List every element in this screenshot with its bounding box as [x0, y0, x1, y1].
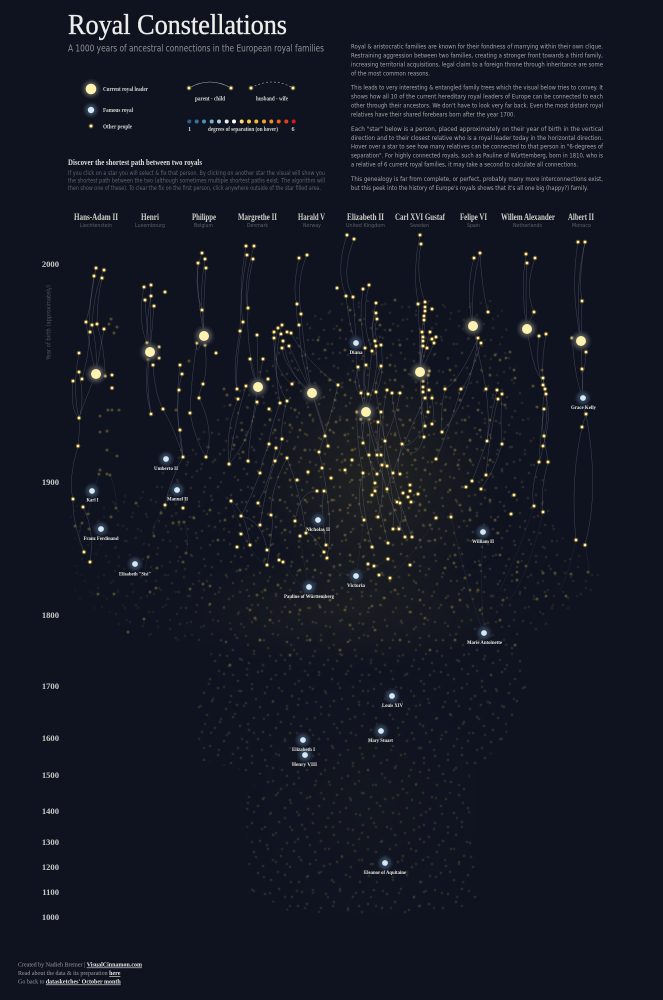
year axis [42, 259, 59, 922]
famous royal labels: Louis XIV [382, 703, 403, 709]
year axis: 1600 [42, 733, 59, 743]
royal leader column headers: Harald V [298, 213, 325, 223]
legend: star types [80, 78, 148, 130]
famous royal labels [84, 350, 596, 876]
faint links [79, 474, 589, 633]
royal leader column headers [74, 213, 594, 229]
legend item: famous royal: Famous royal [103, 107, 133, 114]
text block: introduction: a relative of 6 current royal families, it may take a second to calculate all connections. [351, 162, 578, 168]
subtitle: A 1000 years of ancestral connections in the European royal families [68, 44, 324, 54]
faint haze of ancestors [170, 350, 530, 930]
ordinary relatives: bright stars [73, 235, 586, 578]
royal leader column headers: Philippe [192, 213, 216, 223]
constellation network [60, 235, 610, 930]
text block: shortest path instructions: If you click on a star you will select & fix that person. By clicking on another star the visual will show you [68, 170, 325, 177]
legend: link types [187, 82, 295, 102]
text block: introduction: Each "star" below is a person, placed approximately on their year of birth in the vertical [351, 126, 603, 133]
year axis: 1800 [42, 610, 59, 620]
text block: introduction: relatives have their shared forebears born after the year 1700. [351, 112, 515, 118]
text block: introduction: increasing territorial acquisitions, legal claim to a foreign throne through inheritance are some [351, 62, 603, 68]
famous royal labels: Karl I [86, 498, 98, 504]
year axis: 1500 [42, 770, 59, 780]
famous royals [84, 334, 592, 872]
text block: introduction: This genealogy is far from complete, or perfect, probably many more interconnections exist, [350, 176, 603, 183]
text block: introduction: direction and to their closest relative who is a royal leader today in the horizontal direction. [351, 135, 603, 142]
year axis: 1700 [42, 681, 59, 691]
famous royal labels: Marie Antoinette [467, 640, 503, 646]
royal leader column headers: Liechtenstein [80, 223, 112, 229]
current royal leaders [85, 315, 592, 423]
royal leader column headers: Willem Alexander [501, 213, 556, 223]
royal leader column headers: Luxembourg [135, 223, 165, 229]
footer credits: Go back to datasketches' October month [18, 980, 121, 986]
text block: shortest path instructions: then show one of these). To clear the fix on the first person, click anywhere outside of the star filled area. [68, 185, 321, 192]
legend item: husband - wife link: husband - wife [256, 96, 288, 102]
text block: introduction: but this peek into the history of Europe's royals shows that it's all one big (happy?) family. [351, 185, 588, 192]
famous royal labels: Eleanor of Aquitaine [364, 870, 407, 876]
famous royal labels: Pauline of Württemberg [284, 594, 334, 600]
text block: introduction: This leads to very interesting & entangled family trees which the visual below tries to convey. It [350, 84, 603, 92]
title: Royal Constellations [68, 9, 287, 41]
royal leader column headers: Carl XVI Gustaf [395, 213, 446, 223]
text block: introduction: Restraining aggression between two families, creating a stronger front towards a third family, [351, 52, 603, 60]
royal leader column headers: Netherlands [513, 223, 542, 229]
famous royal labels: William II [472, 539, 494, 545]
royal leader column headers: Denmark [247, 223, 269, 229]
famous royal labels: Henry VIII [292, 762, 317, 768]
text block: introduction [350, 44, 604, 192]
parent-child links of royal families [71, 235, 593, 565]
famous royal labels: Manuel II [167, 496, 188, 502]
text block: introduction: shows how all 10 of the current hereditary royal leaders of Europe can be connected to each [351, 94, 603, 100]
famous royal labels: Umberto II [154, 466, 178, 472]
famous royal labels: Nicholas II [306, 527, 330, 533]
year axis: 1400 [42, 806, 59, 816]
royal leader column headers: Margrethe II [238, 213, 277, 223]
text block: introduction: separation". For highly connected royals, such as Pauline of Württemberg, born in 1810, who is [351, 152, 603, 160]
year axis: 1300 [42, 837, 59, 847]
famous royal labels: Elizabeth I [292, 747, 315, 753]
royal leader column headers: Albert II [568, 213, 594, 223]
year axis: 2000 [42, 259, 59, 269]
royal leader column headers: Felipe VI [460, 213, 487, 223]
royal leader column headers: Henri [141, 213, 159, 223]
royal leader column headers: Belgium [194, 223, 213, 229]
text block: introduction: other through their ancestors. We don't have to look very far back. Even the most distant royal [351, 102, 603, 110]
year axis: 1000 [42, 912, 59, 922]
year axis: 1900 [42, 477, 59, 487]
legend: degrees of separation: degrees of separation (on hover) [208, 126, 278, 133]
faint ancestor stars: early centuries [190, 640, 535, 920]
footer credits: Created by Nadieh Bremer | VisualCinnamon.com [18, 962, 142, 968]
royal leader column headers: Norway [303, 223, 322, 229]
famous royal labels: Mary Stuart [368, 738, 393, 744]
text block: shortest path instructions: the shortest path between the two (although sometimes multiple shortest paths exist. The algorithm will [68, 177, 325, 184]
famous royal labels: Grace Kelly [571, 405, 596, 411]
year axis: 1200 [42, 862, 59, 872]
famous royal labels: Franz Ferdinand [84, 536, 118, 542]
legend item: other people: Other people [103, 124, 132, 130]
famous royal labels: Elisabeth "Sisi" [119, 572, 151, 578]
royal leader column headers: Hans-Adam II [74, 213, 118, 223]
legend item: parent - child link: parent - child [195, 96, 225, 102]
axis title: Year of birth (approximately) [46, 285, 52, 361]
royal leader column headers: Monaco [572, 223, 591, 229]
faint ancestor stars: recent centuries [60, 300, 610, 650]
text block: introduction: of the most common reasons. [351, 70, 430, 78]
text block: introduction: Hover over a star to see how many relatives can be connected to that person in "6-degrees of [351, 144, 604, 150]
text block: shortest path instructions [68, 170, 325, 192]
royal leader column headers: Sweden [410, 223, 429, 229]
heading: discover the shortest path: Discover the shortest path between two royals [68, 157, 203, 167]
royal leader column headers: Elizabeth II [347, 213, 384, 223]
legend: degrees of separation: 1 [188, 126, 191, 133]
year axis: 1100 [42, 887, 59, 897]
famous royal labels: Diana [350, 350, 363, 356]
royal leader column headers: United Kingdom [346, 223, 385, 229]
text block: introduction: Royal & aristocratic families are known for their fondness of marrying within their own clique. [351, 44, 603, 50]
legend: degrees of separation [187, 120, 296, 133]
famous royal labels: Victoria [347, 583, 365, 589]
ancestor stars of medium brightness [75, 300, 588, 665]
legend: degrees of separation: 6 [292, 126, 295, 133]
footer credits: Read about the data & its preparation here [18, 971, 121, 977]
footer credits [18, 962, 142, 986]
royal leader column headers: Spain [467, 223, 480, 229]
legend item: current royal leader: Current royal leader [103, 86, 148, 93]
